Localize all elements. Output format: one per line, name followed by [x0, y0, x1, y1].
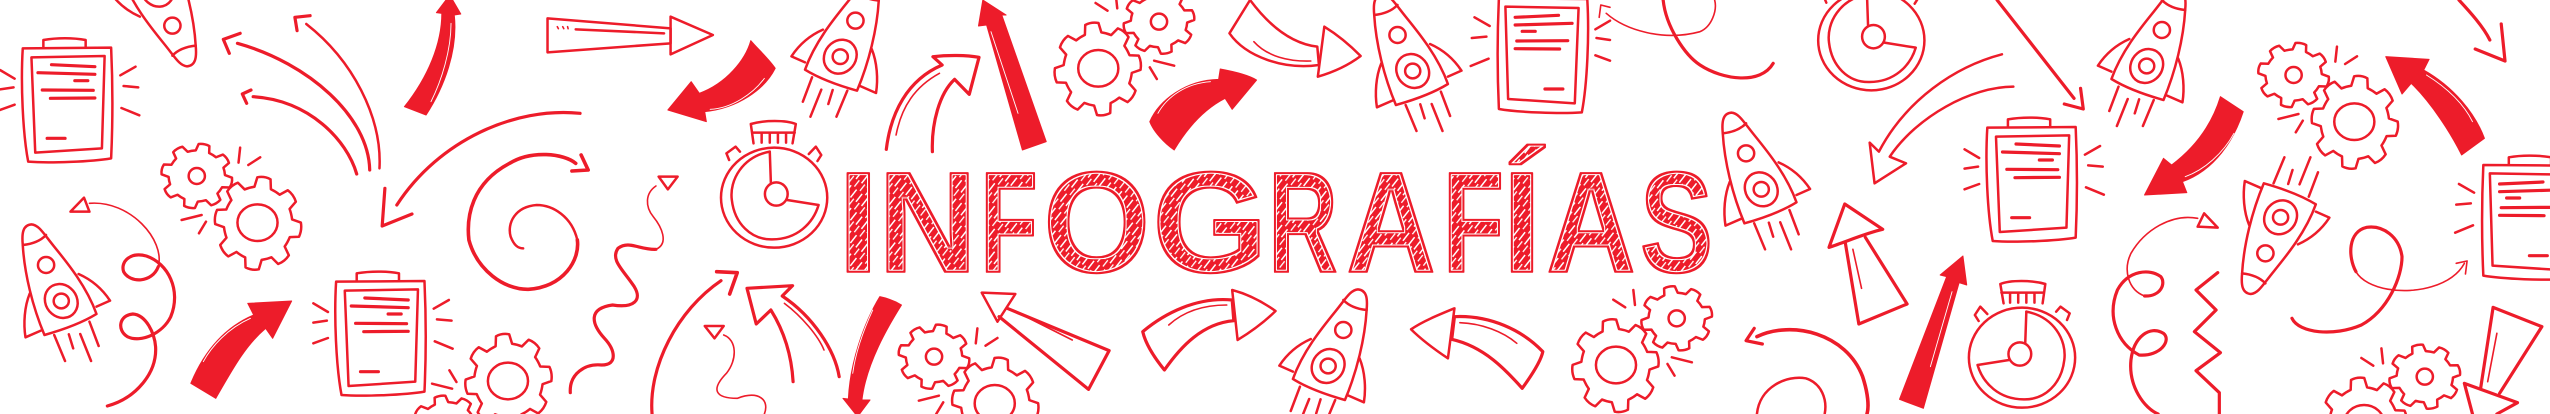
arrow: looped line with triangle [2113, 213, 2218, 414]
arrow: outlined up [1829, 204, 1907, 324]
arrow: solid curved up-left [2386, 57, 2484, 155]
icon: gears mirrored [2314, 338, 2467, 414]
icon: rocket mirrored [791, 0, 879, 117]
title: A [1546, 142, 1636, 303]
icon: clipboard [0, 38, 139, 162]
icon: gears mirrored [1566, 280, 1719, 414]
title: F [1443, 142, 1504, 303]
icon: rocket [22, 224, 110, 361]
icon: clipboard mirrored [2455, 156, 2550, 280]
icon: stopwatch [721, 121, 827, 248]
arrow: solid up [978, 0, 1046, 150]
arrow: outlined curved right [1229, 0, 1361, 77]
arrow: top right thin [2459, 0, 2505, 61]
icon: clipboard [1965, 118, 2104, 242]
icon: gears [2251, 37, 2404, 175]
icon: rocket mirrored [2098, 0, 2186, 126]
icon: rocket mirrored [1279, 289, 1367, 414]
icon: stopwatch [1818, 0, 1924, 90]
icon: gears [405, 328, 558, 414]
icon: gears [892, 318, 1044, 414]
title: I [837, 142, 879, 303]
icon: gears [154, 138, 307, 276]
arrow: outlined up-right [886, 55, 979, 152]
arrow: two-line outlined [1870, 54, 2013, 183]
panel: left doodles [0, 0, 879, 414]
arrow: solid curved down-left [2145, 97, 2243, 195]
title: F [980, 142, 1038, 303]
icon: rocket [1722, 113, 1810, 249]
arrow: solid up [1899, 256, 1967, 408]
icon: rocket flipped [2242, 157, 2329, 294]
arrow: outlined up-left [747, 286, 839, 382]
arrow: solid curved up-right [1150, 69, 1257, 150]
panel: right doodles [1722, 0, 2550, 414]
arrow: outlined right [548, 17, 713, 54]
arrow: outlined down [2464, 307, 2542, 414]
icon: rocket [1374, 0, 1461, 131]
arrow: solid curved down-left [668, 41, 775, 122]
title: A [1346, 142, 1436, 303]
arrow: long thin diagonal [1997, 0, 2083, 109]
title: S [1640, 142, 1713, 303]
arrow: thin looped lines [1599, 0, 1773, 78]
icon: clipboard mirrored [1471, 0, 1610, 113]
arrow: solid up [404, 0, 461, 115]
icon: clipboard [313, 272, 453, 396]
arrow: looped line [70, 198, 175, 406]
arrow: curved spiral [1746, 328, 1868, 414]
arrow: outlined curved right [1143, 290, 1276, 370]
panel: centre doodles [843, 0, 1773, 414]
title: Í [1502, 142, 1546, 303]
icon: stopwatch mirrored [1969, 281, 2075, 408]
arrow: long curved thin [382, 112, 580, 226]
title: O [1043, 142, 1150, 303]
title: N [878, 142, 977, 303]
icon: gears [1049, 0, 1201, 122]
arrow: spiral [468, 155, 588, 289]
title: R [1268, 142, 1338, 303]
icon: rocket upside down [108, 0, 196, 66]
arrow: solid curved down [843, 297, 901, 414]
arrow: outlined curved left [1411, 308, 1543, 388]
arrow: thin squiggle [705, 326, 766, 414]
arrow: squiggle [570, 177, 678, 393]
arrows: three thin arcs [223, 16, 380, 174]
title: G [1152, 142, 1268, 303]
arrow: large arc [652, 272, 737, 414]
arrow: solid up-right [191, 301, 292, 398]
arrow: looped line right [2292, 227, 2467, 332]
arrow: outlined up-left [982, 293, 1109, 389]
zigzag line [2194, 273, 2220, 414]
